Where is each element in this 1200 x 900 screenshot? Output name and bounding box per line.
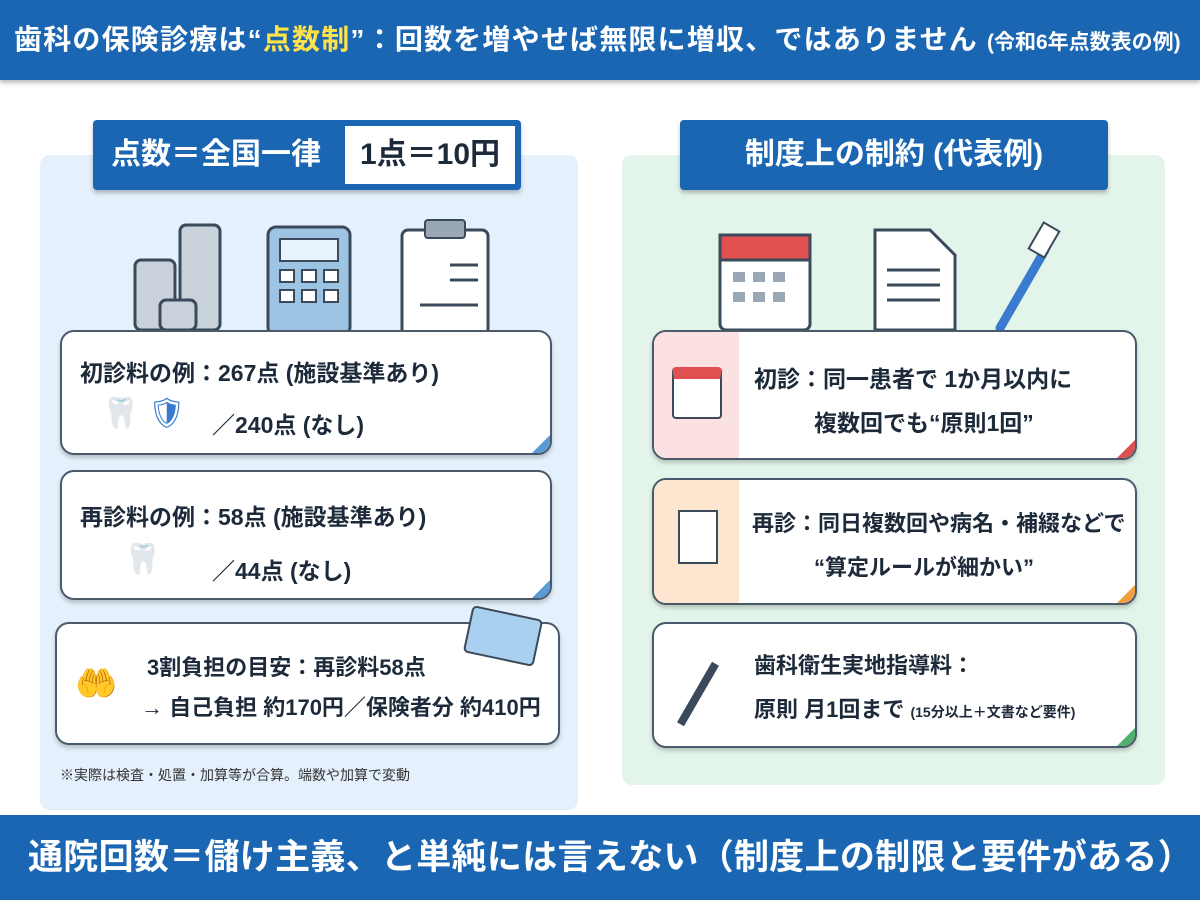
callout: copay estimate: 3割負担の目安：再診料58点: [147, 655, 426, 680]
card: revisit rule: 再診：同日複数回や病名・補綴などで: [752, 511, 1126, 536]
callout: copay estimate: [55, 622, 560, 745]
icon: toothbrush: [677, 662, 719, 726]
bottom conclusion bar: 通院回数＝儲け主義、と単純には言えない（制度上の制限と要件がある）: [28, 838, 1193, 877]
card: revisit fee: 再診料の例：58点 (施設基準あり): [80, 504, 426, 530]
card: revisit fee: ／44点 (なし): [212, 558, 351, 584]
card: hygiene guidance fee: [652, 622, 1137, 748]
icon: document: [678, 510, 718, 564]
heading: constraints: 制度上の制約 (代表例): [745, 138, 1043, 171]
card: initial visit fee: 初診料の例：267点 (施設基準あり): [80, 360, 439, 386]
heading: points nationwide: [93, 120, 521, 190]
heading: points nationwide: 点数＝全国一律: [111, 138, 321, 171]
card: first visit rule: 初診：同一患者で 1か月以内に: [754, 366, 1072, 392]
footnote: ※実際は検査・処置・加算等が合算。端数や加算で変動: [60, 767, 410, 783]
heading: points nationwide: 1点＝10円: [360, 138, 500, 171]
heading: constraints: [680, 120, 1108, 190]
icon: coins hand: 🤲: [75, 665, 117, 703]
icon: insurance card: [463, 605, 543, 667]
bottom conclusion bar: [0, 815, 1200, 900]
icon: calendar: [672, 367, 722, 419]
panel: left points: [40, 155, 578, 810]
title bar: [0, 0, 1200, 80]
card: initial visit fee: [60, 330, 552, 455]
card: first visit rule: 複数回でも“原則1回”: [814, 410, 1034, 436]
card: revisit rule: [652, 478, 1137, 605]
title bar: 歯科の保険診療は“点数制”：回数を増やせば無限に増収、ではありません (令和6年点数表の例): [14, 24, 1181, 55]
panel: right constraints: [622, 155, 1165, 785]
card: revisit fee: [60, 470, 552, 600]
icons: coins calculator chart: [134, 219, 490, 330]
card: first visit rule: [652, 330, 1137, 460]
card: hygiene guidance fee: 原則 月1回まで (15分以上＋文書など要件): [754, 697, 1075, 722]
card: initial visit fee: ／240点 (なし): [212, 412, 364, 438]
icon: tooth: 🦷: [124, 543, 161, 576]
icons: calendar document toothbrush: [718, 221, 1061, 330]
callout: copay estimate: → 自己負担 約170円／保険者分 約410円: [141, 695, 541, 720]
card: hygiene guidance fee: 歯科衛生実地指導料：: [754, 653, 974, 678]
icon: tooth and shield: 🦷 🛡: [102, 397, 186, 430]
card: revisit rule: “算定ルールが細かい”: [814, 555, 1034, 580]
